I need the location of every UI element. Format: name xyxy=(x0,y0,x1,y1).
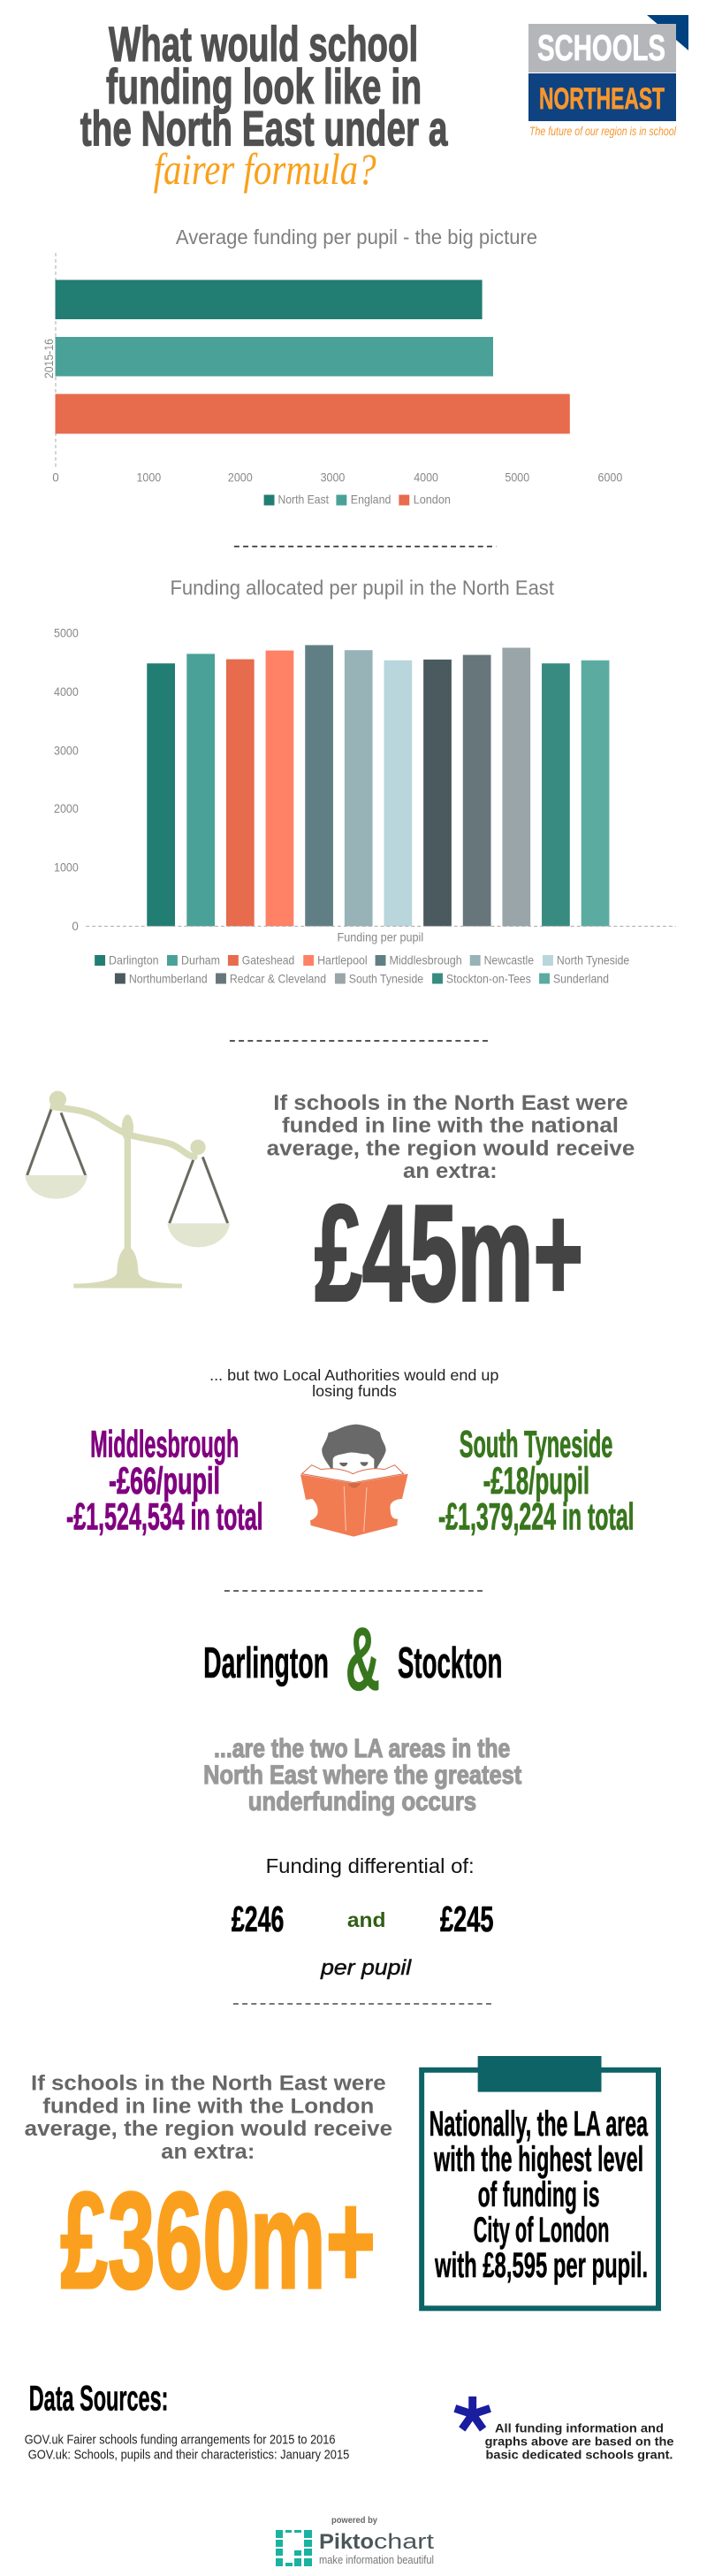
legend: South Tyneside xyxy=(349,973,423,986)
legend xyxy=(95,953,629,986)
text block: two local authorities: ... but two Local Authorities would end up xyxy=(209,1366,498,1384)
legend: England xyxy=(351,493,391,507)
heading: Darlington & Stockton: Stockton xyxy=(398,1640,502,1687)
bar: London xyxy=(55,394,570,433)
y axis labels: 0 xyxy=(72,920,79,933)
text block: London average: If schools in the North East were xyxy=(31,2071,386,2095)
text block: London average: average, the region would receive xyxy=(25,2117,392,2141)
x axis labels: 2000 xyxy=(228,471,253,485)
text block: sources list: GOV.uk: Schools, pupils and their characteristics: January 2015 xyxy=(28,2447,349,2463)
title: What would school xyxy=(109,17,418,72)
x axis labels: 0 xyxy=(52,471,59,485)
footer: Piktochart logo: make information beautiful xyxy=(319,2554,434,2566)
icon: Piktochart mark xyxy=(276,2530,312,2566)
text block: footnote: All funding information and xyxy=(495,2421,664,2435)
y axis label: 2015-16 xyxy=(42,339,56,378)
legend: Hartlepool xyxy=(317,953,368,967)
y axis labels: 3000 xyxy=(54,744,79,757)
icon: balance scales xyxy=(25,1091,230,1288)
text: per pupil: per pupil xyxy=(320,1956,412,1980)
legend: Middlesbrough xyxy=(389,953,462,967)
text block: greatest underfunding: North East where the greatest xyxy=(203,1761,521,1790)
callout: Middlesbrough: Middlesbrough xyxy=(90,1423,239,1464)
text block: national average: funded in line with the national xyxy=(282,1114,619,1138)
panel: City of London callout xyxy=(422,2056,658,2308)
callout: South Tyneside xyxy=(438,1423,635,1538)
title xyxy=(80,17,448,157)
legend: Newcastle xyxy=(484,953,534,967)
text block: footnote: graphs above are based on the xyxy=(485,2434,674,2449)
x axis labels: 1000 xyxy=(136,471,161,485)
bars xyxy=(147,646,609,926)
x axis label: Funding per pupil xyxy=(338,930,423,944)
text block: greatest underfunding: underfunding occurs xyxy=(248,1787,476,1816)
callout: South Tyneside: -£18/pupil xyxy=(483,1460,589,1502)
x axis labels: 5000 xyxy=(505,471,529,485)
stat: £246: £246 xyxy=(232,1899,284,1939)
legend: Stockton-on-Tees xyxy=(446,973,531,986)
legend: London xyxy=(414,493,451,507)
heading: Darlington & Stockton xyxy=(203,1609,502,1709)
y axis labels: 4000 xyxy=(54,685,79,699)
heading: Data Sources: Data Sources: xyxy=(29,2379,168,2419)
title accent: fairer formula?: fairer formula? xyxy=(154,145,376,194)
legend: Northumberland xyxy=(129,973,208,986)
text block: sources list xyxy=(25,2433,349,2463)
text block: national average: an extra: xyxy=(403,1159,498,1183)
title: funding look like in xyxy=(106,59,422,114)
legend xyxy=(264,493,451,507)
text block: funding differential: Funding differential of: xyxy=(266,1854,475,1877)
heading: average funding chart: Average funding per pupil - the big picture xyxy=(176,225,537,248)
text block: footnote xyxy=(485,2421,674,2462)
footer: Piktochart logo: chart xyxy=(374,2530,434,2554)
footer: Piktochart logo: Pikto xyxy=(319,2530,374,2554)
text block: footnote: basic dedicated schools grant. xyxy=(486,2447,673,2462)
clipboard tab xyxy=(478,2056,602,2092)
legend: Darlington xyxy=(109,953,159,967)
bar: England xyxy=(55,337,493,377)
text block: London average: funded in line with the London xyxy=(42,2094,374,2118)
text block: London average xyxy=(25,2071,392,2164)
y axis labels: 1000 xyxy=(54,861,79,875)
legend: North Tyneside xyxy=(557,953,629,967)
bar chart: funding per pupil by local authority xyxy=(54,627,676,986)
callout: Middlesbrough: -£1,524,534 in total xyxy=(66,1495,263,1538)
heading: funding allocated chart: Funding allocated per pupil in the North East xyxy=(170,576,555,599)
x axis labels: 3000 xyxy=(321,471,345,485)
y axis labels: 5000 xyxy=(54,627,79,640)
icon: asterisk xyxy=(455,2396,490,2429)
heading: Darlington & Stockton: & xyxy=(346,1609,380,1709)
text block: greatest underfunding xyxy=(203,1734,521,1816)
legend: Gateshead xyxy=(242,953,294,967)
stat: £245: £245 xyxy=(440,1899,493,1939)
footer: Piktochart logo: powered by xyxy=(331,2515,377,2526)
big number: £360m+: £360m+ xyxy=(60,2164,376,2317)
y axis labels xyxy=(54,627,79,933)
text block: national average: If schools in the North East were xyxy=(273,1091,628,1115)
text block: two local authorities xyxy=(209,1366,498,1400)
text block: national average: average, the region would receive xyxy=(267,1137,635,1161)
callout: Middlesbrough: -£66/pupil xyxy=(109,1460,220,1502)
x axis labels xyxy=(52,471,622,485)
connector word: and: and xyxy=(347,1908,385,1931)
icon: person reading a book xyxy=(300,1425,408,1537)
heading: Darlington & Stockton: Darlington xyxy=(203,1640,329,1687)
x axis labels: 6000 xyxy=(598,471,622,485)
callout text xyxy=(430,2105,649,2285)
x axis labels: 4000 xyxy=(414,471,438,485)
callout: Middlesbrough xyxy=(66,1423,263,1538)
text block: two local authorities: losing funds xyxy=(312,1382,397,1400)
legend: Redcar & Cleveland xyxy=(230,973,326,986)
text block: national average xyxy=(267,1091,635,1183)
callout text: of funding is xyxy=(478,2175,600,2214)
text block: greatest underfunding: ...are the two LA areas in the xyxy=(214,1734,510,1763)
footer: Piktochart logo xyxy=(276,2515,434,2566)
bar chart: average funding per pupil xyxy=(42,253,622,507)
title: the North East under a xyxy=(80,101,448,157)
legend: Durham xyxy=(181,953,220,967)
bar: North East xyxy=(55,279,483,319)
text block: sources list: GOV.uk Fairer schools funding arrangements for 2015 to 2016 xyxy=(25,2433,335,2448)
logo: Schools North East xyxy=(528,15,688,138)
legend: North East xyxy=(277,493,329,507)
text block: London average: an extra: xyxy=(161,2140,255,2164)
legend: Sunderland xyxy=(553,973,609,986)
y axis labels: 2000 xyxy=(54,802,79,815)
